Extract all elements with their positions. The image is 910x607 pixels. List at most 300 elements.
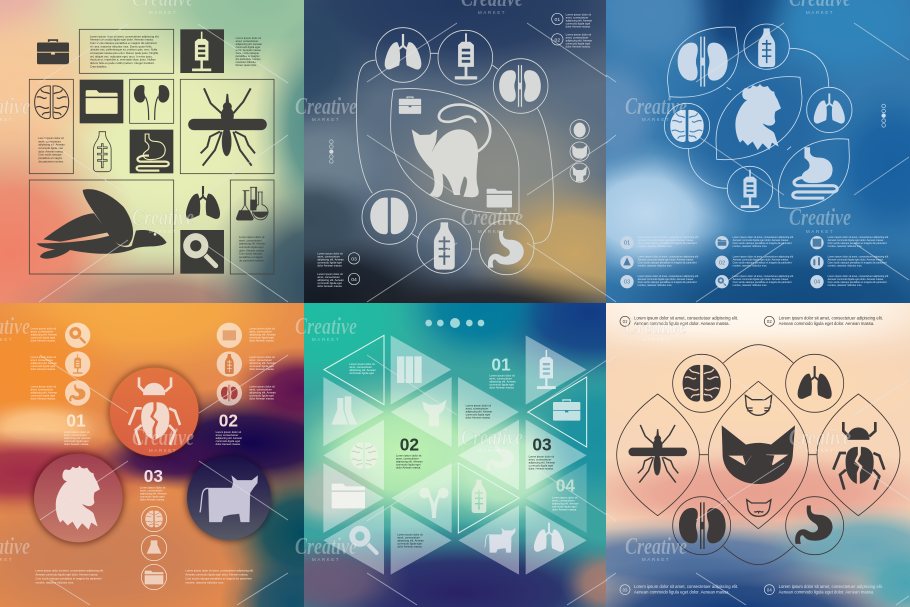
text blocks around numbers: Lorem ipsum dolor sit xyxy=(64,430,90,434)
watermark: Creative Market wordmarks: MARKET xyxy=(806,448,834,453)
text blocks around numbers: dolor Aenean massa. xyxy=(216,442,241,446)
text block: right of syringe: Cum sociis natoque xyxy=(236,51,260,55)
text: bottom left description: Lorem ipsum dolor sit amet, consectetuer adipiscing elit. xyxy=(35,569,104,573)
legend: description text: montes, nascetur ridiculus mus. xyxy=(638,284,672,287)
watermark: Creative Market wordmarks: Creative xyxy=(625,534,687,560)
legend: numbered and icon badges xyxy=(620,236,824,288)
callout: item 03: adipiscing elit. Aenean xyxy=(317,258,344,262)
icon: stomach xyxy=(795,505,833,544)
icon: kidneys with ureters xyxy=(134,85,169,120)
text blocks around numbers: adipiscing elit. Aenean xyxy=(31,361,58,365)
callout: item 04: Lorem ipsum dolor sit amet, consectetuer adipiscing elit. xyxy=(779,584,883,589)
watermark: Creative Market wordmarks: MARKET xyxy=(642,337,670,342)
legend: description text: Lorem ipsum dolor sit amet, consectetuer adipiscing elit. xyxy=(828,256,889,259)
watermark: Creative Market wordmarks: MARKET xyxy=(806,10,834,15)
legend: description text: Lorem ipsum dolor sit amet, consectetuer adipiscing elit. xyxy=(828,236,889,239)
text: bottom left description: Cum sociis natoque penatibus et magnis dis parturient xyxy=(35,577,102,581)
number 03: 03 xyxy=(144,466,163,486)
text block: top lorem box: montes, nascetur ridiculus mus. Donec quam felis, xyxy=(90,44,152,48)
text blocks around numbers: amet, consectetuer xyxy=(31,330,53,334)
icon: brain xyxy=(370,198,408,234)
triangle text blocks: dark: commodo ligula eget xyxy=(466,413,490,417)
callout: item 04: amet, consectetuer xyxy=(317,275,340,279)
text: bottom right description: montes, nascetur ridiculus mus. xyxy=(185,581,224,585)
icon: arched cat xyxy=(412,105,490,197)
text block: under brain: penatibus et magnis xyxy=(38,156,63,160)
icon: beetle xyxy=(833,422,884,490)
text block: under flasks: amet, consectetuer xyxy=(239,238,262,242)
panel: triangle mosaic on teal and purple background xyxy=(304,303,608,607)
translucent triangles xyxy=(323,335,587,575)
watermark: Creative Market wordmarks: MARKET xyxy=(312,557,340,562)
text block: top lorem box: ultricies nec, pellentesque eu, pretium quis, sem. Nulla xyxy=(90,48,158,52)
panel: turtle and mosquito grid on pastel background xyxy=(0,0,304,303)
icon: small cat head bottom xyxy=(747,500,771,516)
background: soft slate and gold gradient xyxy=(304,0,608,303)
triangle text blocks: dark: amet, consectetuer xyxy=(466,407,488,411)
text blocks around numbers: commodo ligula eget xyxy=(249,336,274,340)
callout: item 03: Lorem ipsum dolor sit amet, consectetuer adipiscing elit. xyxy=(634,584,738,589)
organ leaf network outline xyxy=(664,24,852,212)
legend: description text: Lorem ipsum dolor sit amet, consectetuer adipiscing elit. xyxy=(638,256,699,259)
triangle text blocks: dark: dolor Aenean massa. xyxy=(466,416,491,420)
legend: description text: montes, nascetur ridiculus mus. xyxy=(638,265,672,268)
watermark: Creative Market wordmarks: Creative xyxy=(132,205,194,231)
text: bottom left description: Aenean commodo ligula eget dolor. Aenean massa. xyxy=(35,573,98,577)
text blocks around numbers: amet, consectetuer xyxy=(64,433,87,437)
watermark: Creative Market wordmarks: Creative xyxy=(295,534,357,560)
text blocks around numbers: commodo ligula eget xyxy=(216,439,240,443)
triangle text blocks: light: commodo ligula eget xyxy=(489,382,514,386)
text blocks around numbers: Lorem ipsum dolor sit xyxy=(140,485,166,489)
text block: right of syringe: adipiscing elit. Aenean xyxy=(236,42,263,46)
background: soft orange and purple gradient xyxy=(0,303,304,607)
triangle text blocks: dark: amet, consectetuer xyxy=(397,535,420,539)
legend: badge labels and glyphs: 03 xyxy=(624,280,630,286)
triangle text blocks: light: adipiscing elit. Aenean xyxy=(552,501,579,505)
legend: badge labels and glyphs: 01 xyxy=(624,241,630,247)
panel: rooster and organ leaves on blue background xyxy=(606,0,910,303)
text block: under flasks: dis parturient montes. xyxy=(239,258,265,262)
triangle text blocks: dark xyxy=(396,404,556,548)
watermark: Creative Market wordmarks: MARKET xyxy=(806,229,834,234)
triangle text blocks: dark: amet, consectetuer xyxy=(396,457,419,461)
text block: under flasks: adipiscing elit. Aenean xyxy=(239,242,266,246)
text block: under brain: adipiscing elit. Aenean xyxy=(38,143,65,147)
icon: folder xyxy=(86,90,118,114)
watermark: Creative Market wordmarks: MARKET xyxy=(478,229,506,234)
icon: binders xyxy=(397,356,422,383)
text block: under flasks: commodo ligula eget xyxy=(239,245,264,249)
watermark: Creative Market wordmarks: MARKET xyxy=(478,10,506,15)
icon: brain outline xyxy=(35,86,69,119)
text blocks around numbers: amet, consectetuer xyxy=(31,358,53,362)
legend: badge labels and glyphs xyxy=(623,239,821,286)
text block: under flasks: Cum sociis natoque xyxy=(239,252,263,256)
number 02: 02 xyxy=(400,434,419,454)
legend: description text: montes, nascetur ridiculus mus. xyxy=(828,284,862,287)
watermark: Creative Market wordmarks: MARKET xyxy=(642,557,670,562)
triangle text blocks: light: adipiscing elit. Aenean xyxy=(489,379,516,383)
icon: thermometer xyxy=(758,28,775,67)
callout: item 02: adipiscing elit. Aenean xyxy=(566,39,593,43)
legend: description text: montes, nascetur ridiculus mus. xyxy=(828,265,862,268)
text blocks around numbers: amet, consectetuer xyxy=(249,358,272,362)
icon: cow xyxy=(485,528,515,553)
number 01: 01 xyxy=(66,411,86,431)
callout: item 01: Lorem ipsum dolor sit xyxy=(566,12,591,16)
legend: description text: Cum sociis natoque penatibus et magnis dis parturient xyxy=(733,262,792,265)
legend: description text: Cum sociis natoque penatibus et magnis dis parturient xyxy=(733,281,792,284)
icon: magnifier, syringe, stomach in column one xyxy=(69,327,86,401)
watermark: Creative Market wordmarks: Creative xyxy=(132,425,194,451)
text blocks around numbers: adipiscing elit. Aenean xyxy=(31,333,58,337)
legend: description text: Aenean commodo ligula eget dolor. Aenean massa. xyxy=(638,239,694,242)
text blocks around numbers: Lorem ipsum dolor sit xyxy=(31,384,56,388)
triangle text blocks: dark: commodo ligula eget xyxy=(396,463,421,467)
icon: mosquito xyxy=(629,425,687,483)
icon: kidneys xyxy=(499,65,541,107)
legend: description text: Cum sociis natoque penatibus et magnis dis parturient xyxy=(638,281,697,284)
icon: sea turtle xyxy=(37,189,167,259)
text blocks around numbers: adipiscing elit. Aenean xyxy=(140,491,167,495)
watermark: Creative Market wordmarks: MARKET xyxy=(642,117,670,122)
text blocks around numbers: commodo ligula eget xyxy=(249,364,274,368)
triangle text blocks: dark: Lorem ipsum dolor sit xyxy=(397,532,423,536)
icon: lungs xyxy=(798,366,832,399)
text blocks around numbers: commodo ligula eget xyxy=(31,336,55,340)
icon: syringe xyxy=(537,350,556,389)
callout: item 01: 01 xyxy=(623,319,628,324)
callout: item 04: Aenean commodo ligula eget dolor. Aenean massa. xyxy=(779,589,874,594)
callout: item 02: Lorem ipsum dolor sit amet, consectetuer adipiscing elit. xyxy=(779,316,883,321)
background: soft pastel gradient xyxy=(0,0,304,303)
text blocks around numbers: Lorem ipsum dolor sit xyxy=(249,327,275,331)
callout: item 01: Lorem ipsum dolor sit amet, consectetuer adipiscing elit. xyxy=(634,316,738,321)
text block: top lorem box: dictum felis eu pede mollis pretium. Integer tincidunt. xyxy=(90,61,155,65)
number 02: 02 xyxy=(219,411,238,431)
triangle text blocks: dark: Lorem ipsum dolor sit xyxy=(396,454,422,458)
background: soft teal and purple gradient xyxy=(304,303,608,607)
legend: description text: Lorem ipsum dolor sit amet, consectetuer adipiscing elit. xyxy=(733,256,794,259)
callout: item 02: Lorem ipsum dolor sit xyxy=(566,33,591,37)
text block: top lorem box: rhoncus ut, imperdiet a, venenatis vitae, justo. Nullam xyxy=(90,58,157,62)
triangle text blocks: dark: adipiscing elit. Aenean xyxy=(529,460,556,464)
triangle text blocks: light: amet, consectetuer xyxy=(349,365,372,369)
text: bottom right description: Cum sociis natoque penatibus et magnis dis parturient xyxy=(185,577,252,581)
text block: under brain: Cum sociis natoque xyxy=(38,153,62,157)
text: bottom left description: montes, nascetur ridiculus mus. xyxy=(35,581,74,585)
callout: item 02: amet, consectetuer xyxy=(566,36,588,40)
callout: item 03: 03 xyxy=(351,256,357,262)
text blocks around numbers: Lorem ipsum dolor sit xyxy=(31,327,56,331)
panel: beetle, rooster and cow circles on orange and purple background xyxy=(0,303,304,607)
legend: description text: Cum sociis natoque penatibus et magnis dis parturient xyxy=(828,281,887,284)
callout: item 04: dolor Aenean massa. xyxy=(317,284,343,288)
text block: under brain: dolor. Aenean massa. xyxy=(38,149,64,153)
text block: right of syringe: nascetur ridiculus xyxy=(236,60,257,64)
icon: stomach and intestine xyxy=(137,134,169,171)
legend: description text: Cum sociis natoque penatibus et magnis dis parturient xyxy=(828,262,887,265)
legend: badge labels and glyphs: 02 xyxy=(719,260,725,266)
watermark: Creative Market wordmarks: MARKET xyxy=(149,448,177,453)
icon: briefcase xyxy=(399,97,421,114)
icon: folder xyxy=(487,189,512,207)
legend: description text: montes, nascetur ridiculus mus. xyxy=(638,245,672,248)
legend: description text: Aenean commodo ligula eget dolor. Aenean massa. xyxy=(828,239,884,242)
text block: right of syringe: amet, consectetuer xyxy=(236,39,258,43)
text blocks around numbers xyxy=(31,327,276,501)
watermark: Creative Market wordmarks: Creative xyxy=(461,205,523,231)
legend: description text: Cum sociis natoque penatibus et magnis dis parturient xyxy=(733,242,792,245)
triangle text blocks: light: Lorem ipsum dolor sit xyxy=(349,362,375,366)
icon: large cat head xyxy=(722,425,795,484)
icon: magnifier xyxy=(349,526,379,555)
text blocks around numbers: amet, consectetuer xyxy=(216,433,238,437)
text blocks around numbers: adipiscing elit. Aenean xyxy=(31,390,58,394)
triangle text blocks: dark: commodo ligula eget xyxy=(529,463,553,467)
legend: description text: montes, nascetur ridiculus mus. xyxy=(828,245,862,248)
pagination dots xyxy=(329,140,333,163)
callout: item 04: Lorem ipsum dolor sit xyxy=(317,272,343,276)
text block: under flasks: penatibus et magnis xyxy=(239,255,263,259)
text blocks around numbers: commodo ligula eget xyxy=(140,494,165,498)
icon: lungs xyxy=(186,186,220,219)
triangle text blocks: light: adipiscing elit. Aenean xyxy=(349,368,376,372)
triangle text blocks: dark: dolor Aenean massa. xyxy=(396,466,421,470)
icon badges: column two xyxy=(217,323,242,406)
icon: syringe xyxy=(455,33,477,80)
watermark: Creative Market wordmarks: Creative xyxy=(625,94,687,120)
watermark: Creative Market wordmarks: MARKET xyxy=(149,10,177,15)
triangle text blocks: dark: adipiscing elit. Aenean xyxy=(397,538,424,542)
callout: item 02: 02 xyxy=(555,37,560,43)
panel: cat head with insects and organs on peach and navy background xyxy=(606,303,910,607)
icon: kidneys xyxy=(679,502,726,549)
text block: top lorem box: Cum sociis natoque penatibus et magnis dis parturient xyxy=(90,41,157,45)
icon: stomach xyxy=(488,231,524,268)
legend: description text: Cum sociis natoque penatibus et magnis dis parturient xyxy=(638,262,697,265)
text block: top lorem box: Cras dapibus. xyxy=(90,64,107,68)
watermark: Creative Market wordmarks: Creative xyxy=(295,94,357,120)
circle: beetle xyxy=(109,366,200,458)
text blocks around numbers: dolor Aenean massa. xyxy=(140,497,165,501)
text blocks around numbers: dolor Aenean massa. xyxy=(64,442,89,446)
watermark: Creative Market wordmarks: MARKET xyxy=(149,229,177,234)
callout: item 02: Aenean commodo ligula eget dolor. Aenean massa. xyxy=(779,321,874,326)
icon: lungs xyxy=(534,523,564,552)
icon: brain, flasks, folder glyphs xyxy=(145,511,163,584)
callout: item 03: amet, consectetuer xyxy=(317,255,340,259)
text block: under brain: Lorem ipsum dolor sit xyxy=(38,136,64,140)
background: soft peach and navy gradient xyxy=(606,303,910,607)
icon: rooster xyxy=(735,84,781,150)
icon: stomach and intestine xyxy=(793,147,837,198)
callout: item 04: adipiscing elit. Aenean xyxy=(317,278,344,282)
text block: under brain: commodo ligula eget xyxy=(38,146,63,150)
text blocks around numbers: Lorem ipsum dolor sit xyxy=(216,430,241,434)
number 03: 03 xyxy=(532,434,552,454)
watermark: Creative Market wordmarks: MARKET xyxy=(478,448,506,453)
legend: description text: montes, nascetur ridiculus mus. xyxy=(733,284,767,287)
icon: syringe xyxy=(741,170,759,208)
icon badges: brain, flasks, folder outlined xyxy=(141,506,167,590)
text blocks around numbers: adipiscing elit. Aenean xyxy=(216,436,243,440)
icon: folder xyxy=(332,484,365,508)
text block: under flasks: Lorem ipsum dolor sit xyxy=(239,235,265,239)
text blocks around numbers: adipiscing elit. Aenean xyxy=(64,436,91,440)
triangle text blocks: dark: adipiscing elit. Aenean xyxy=(396,460,423,464)
callout: item 02: commodo ligula eget xyxy=(566,42,590,46)
legend: description text: Aenean commodo ligula eget dolor. Aenean massa. xyxy=(733,239,789,242)
text blocks around numbers: dolor Aenean massa. xyxy=(31,367,56,371)
icon: magnifying glass xyxy=(183,233,218,268)
number 04: 04 xyxy=(556,475,575,495)
icon: flasks xyxy=(331,396,357,425)
text blocks around numbers: dolor Aenean massa. xyxy=(31,396,56,400)
solid dark tiles xyxy=(80,29,224,274)
text blocks around numbers: dolor Aenean massa. xyxy=(31,339,56,343)
text block: right of syringe: commodo ligula eget xyxy=(236,45,260,49)
triangle text blocks: light: dolor Aenean massa. xyxy=(489,385,515,389)
text blocks around numbers: adipiscing elit. Aenean xyxy=(249,390,276,394)
watermark: Creative Market wordmarks: Creative xyxy=(789,205,851,231)
text block: right of syringe: dis parturient montes, xyxy=(236,57,261,61)
watermark: Creative Market wordmarks: Creative xyxy=(789,425,851,451)
legend: badge labels and glyphs: 04 xyxy=(814,280,820,286)
text blocks around numbers: adipiscing elit. Aenean xyxy=(249,333,276,337)
callout: item 02: 02 xyxy=(767,319,772,324)
triangle text blocks: light: amet, consectetuer xyxy=(552,498,575,502)
text block: under flasks: dolor. Aenean massa. xyxy=(239,248,265,252)
callout: item 03 xyxy=(317,252,360,268)
callout: item 04: commodo ligula eget xyxy=(317,281,342,285)
text block: right of syringe: penatibus et magnis xyxy=(236,54,260,58)
callout: item 03: dolor Aenean massa. xyxy=(317,264,343,268)
text block: right of syringe: Lorem ipsum dolor sit xyxy=(236,36,261,40)
text blocks around numbers: amet, consectetuer xyxy=(249,387,272,391)
callout: item 01: amet, consectetuer xyxy=(566,15,588,19)
callout: item 03: 03 xyxy=(623,587,628,592)
callout: item 01: adipiscing elit. Aenean xyxy=(566,18,593,22)
background: soft blue gradient xyxy=(606,0,910,303)
legend: description text: Lorem ipsum dolor sit amet, consectetuer adipiscing elit. xyxy=(828,275,889,278)
icon: small cat head top xyxy=(745,395,772,415)
icon: thermometer xyxy=(94,132,111,172)
text blocks around numbers: commodo ligula eget xyxy=(249,393,274,397)
icon: books, thermometer, kidneys in column two xyxy=(221,330,238,401)
icon: thermometer xyxy=(434,222,455,270)
callout: item 01: Aenean commodo ligula eget dolor. Aenean massa. xyxy=(634,321,730,326)
callout: item 03: Aenean commodo ligula eget dolor. Aenean massa. xyxy=(634,589,730,594)
outlined grid boxes xyxy=(29,29,274,274)
triangle text blocks: dark: dolor Aenean massa. xyxy=(529,466,554,470)
callout: item 04 xyxy=(317,272,360,288)
text block: top lorem box: vel, aliquet nec, vulputate eget, arcu. In enim justo, xyxy=(90,54,153,58)
text blocks around numbers: commodo ligula eget xyxy=(64,439,89,443)
watermark: Creative Market wordmarks: MARKET xyxy=(312,117,340,122)
callout: item 03 xyxy=(620,584,738,595)
icon: mosquito xyxy=(188,88,267,166)
text blocks around numbers: commodo ligula eget xyxy=(31,393,55,397)
legend: description text: Lorem ipsum dolor sit amet, consectetuer adipiscing elit. xyxy=(733,236,794,239)
triangle text blocks: light: commodo ligula eget xyxy=(552,504,577,508)
callout: item 02 xyxy=(764,316,883,326)
top dots xyxy=(425,318,484,328)
callout: item 01: commodo ligula eget xyxy=(566,21,590,25)
callout: item 02: dolor Aenean massa. xyxy=(566,45,591,49)
legend: description text: Aenean commodo ligula eget dolor. Aenean massa. xyxy=(733,259,789,262)
legend: description text: Aenean commodo ligula eget dolor. Aenean massa. xyxy=(828,278,884,281)
legend: description text: Aenean commodo ligula eget dolor. Aenean massa. xyxy=(828,259,884,262)
icon badges: column one xyxy=(65,323,90,406)
legend: description text: Cum sociis natoque penatibus et magnis dis parturient xyxy=(638,242,697,245)
text blocks around numbers: amet, consectetuer xyxy=(140,488,163,492)
legend: description text: Aenean commodo ligula eget dolor. Aenean massa. xyxy=(638,278,694,281)
triangle text blocks: dark: commodo ligula eget xyxy=(397,541,422,545)
icon: cow head xyxy=(422,400,447,426)
callout: item 03: commodo ligula eget xyxy=(317,261,342,265)
icon: lungs xyxy=(814,93,845,124)
callout: item 04: 04 xyxy=(351,277,357,283)
icon: thermometer xyxy=(472,480,486,513)
legend: description text: Lorem ipsum dolor sit amet, consectetuer adipiscing elit. xyxy=(638,275,699,278)
organ network outline xyxy=(357,28,553,275)
triangle text blocks: light: dolor Aenean massa. xyxy=(552,507,577,511)
watermark: Creative Market wordmarks: MARKET xyxy=(312,337,340,342)
legend: description text: Aenean commodo ligula eget dolor. Aenean massa. xyxy=(733,278,789,281)
text block: right of syringe: dolor. Aenean massa. xyxy=(236,48,261,52)
text blocks around numbers: Lorem ipsum dolor sit xyxy=(249,384,275,388)
watermark: Creative Market wordmarks: Creative xyxy=(295,314,357,340)
legend: description text: Lorem ipsum dolor sit amet, consectetuer adipiscing elit. xyxy=(733,275,794,278)
callout: item 04 xyxy=(764,584,883,595)
number 01: 01 xyxy=(491,354,511,374)
icon: brain xyxy=(683,365,721,402)
triangle text blocks: light xyxy=(349,362,579,511)
callout: item 03: Lorem ipsum dolor sit xyxy=(317,252,343,256)
outlined triangles xyxy=(324,335,587,533)
icon: kidneys with ureters xyxy=(419,488,449,518)
triangle text blocks: dark: adipiscing elit. Aenean xyxy=(466,410,493,414)
icon: briefcase xyxy=(553,399,580,421)
triangle text blocks: light: Lorem ipsum dolor sit xyxy=(552,495,578,499)
text blocks around numbers: dolor Aenean massa. xyxy=(249,367,275,371)
callout: item 01 xyxy=(552,12,593,28)
text blocks around numbers: amet, consectetuer xyxy=(31,387,53,391)
legend: description text: montes, nascetur ridiculus mus. xyxy=(733,245,767,248)
text blocks around numbers: Lorem ipsum dolor sit xyxy=(31,355,56,359)
icon: kidneys xyxy=(678,37,728,87)
triangle text blocks: dark: Lorem ipsum dolor sit xyxy=(466,404,491,408)
triangle text blocks: light: amet, consectetuer xyxy=(489,376,512,380)
text block: right of syringe: Donec quam felis. xyxy=(236,63,257,67)
text block: top lorem box: consequat massa quis enim. Donec pede justo, fringilla xyxy=(90,51,158,55)
icon: briefcase xyxy=(37,39,69,64)
triangle text blocks: light: commodo ligula eget xyxy=(349,371,374,375)
legend: description text: Aenean commodo ligula eget dolor. Aenean massa. xyxy=(638,259,694,262)
text block: top lorem box: Aenean commodo ligula eget dolor. Aenean massa. xyxy=(90,38,154,42)
icon: chemistry flasks xyxy=(236,187,268,220)
text blocks around numbers: dolor Aenean massa. xyxy=(249,396,275,400)
text blocks around numbers: commodo ligula eget xyxy=(31,364,55,368)
callout: item 01: 01 xyxy=(555,17,560,23)
text blocks around numbers: adipiscing elit. Aenean xyxy=(249,361,276,365)
text: bottom right description: Lorem ipsum dolor sit amet, consectetuer adipiscing elit. xyxy=(185,569,254,573)
icon: brain xyxy=(350,442,378,469)
small animal circles column xyxy=(570,120,589,182)
icon: brain xyxy=(670,110,704,142)
